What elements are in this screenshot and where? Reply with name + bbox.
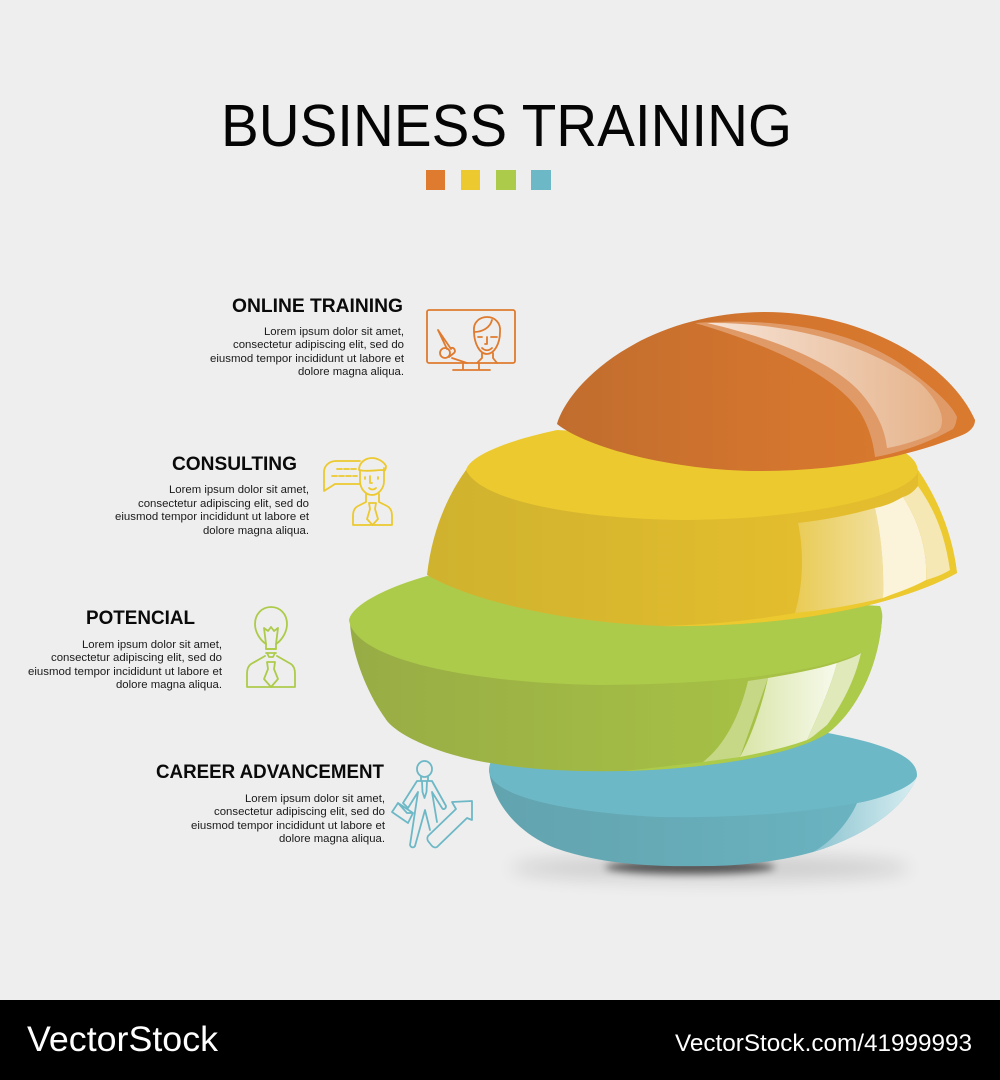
orange dome: [557, 312, 975, 471]
title: BUSINESS TRAINING: [221, 93, 792, 159]
panel: potencial text: Lorem ipsum dolor sit amet,: [82, 639, 222, 651]
panel: career advancement text: eiusmod tempor incididunt ut labore et: [191, 820, 385, 832]
panel: online training text: eiusmod tempor incididunt ut labore et: [210, 353, 404, 365]
panel: potencial text: dolore magna aliqua.: [116, 679, 222, 691]
ground shadow: [510, 855, 910, 881]
footer bar: [0, 1000, 1000, 1080]
panel: online training text: consectetur adipiscing elit, sed do: [233, 339, 404, 351]
green top surface: [349, 576, 882, 685]
panel: consulting text: [115, 454, 309, 537]
panel: yellow layer: [427, 430, 957, 626]
panel: online training text: [210, 296, 404, 378]
panel: online training text: ONLINE TRAINING: [232, 296, 403, 317]
panel: consulting text: dolore magna aliqua.: [203, 525, 309, 537]
panel: consulting text: consectetur adipiscing elit, sed do: [138, 498, 309, 510]
blue highlight: [813, 776, 917, 852]
yellow top surface: [466, 430, 918, 520]
panel: career advancement text: [156, 762, 385, 845]
yellow rim: [660, 470, 957, 626]
footer logo: VectorStock: [27, 1020, 219, 1059]
panel: potencial text: consectetur adipiscing elit, sed do: [51, 652, 222, 664]
orange highlight: [707, 323, 942, 448]
panel: blue layer: [489, 727, 917, 866]
footer url: VectorStock.com/41999993: [675, 1030, 972, 1057]
green bowl: [350, 620, 882, 771]
panel: potencial text: POTENCIAL: [86, 608, 195, 629]
color legend squares: [426, 170, 551, 190]
orange highlight band: [695, 322, 957, 457]
blue bowl: [489, 770, 917, 866]
panel: career advancement text: CAREER ADVANCEMENT: [156, 762, 384, 783]
icon: career person with arrow: [392, 761, 472, 847]
panel: consulting text: CONSULTING: [172, 454, 297, 475]
panel: online training text: dolore magna aliqua.: [298, 366, 404, 378]
green rim: [625, 620, 882, 771]
yellow glass highlight: [795, 486, 950, 613]
panel: consulting text: eiusmod tempor incididunt ut labore et: [115, 511, 309, 523]
panel: consulting text: Lorem ipsum dolor sit amet,: [169, 484, 309, 496]
panel: orange layer: [557, 312, 975, 471]
icon: online training screen: [427, 310, 515, 370]
panel: potencial text: [28, 608, 222, 691]
panel: green layer: [349, 576, 882, 771]
panel: career advancement text: consectetur adipiscing elit, sed do: [214, 806, 385, 818]
panel: career advancement text: dolore magna aliqua.: [279, 833, 385, 845]
yellow body: [427, 470, 957, 626]
icon: potencial lightbulb head: [247, 607, 295, 687]
blue top surface: [489, 727, 917, 817]
panel: career advancement text: Lorem ipsum dolor sit amet,: [245, 793, 385, 805]
icon: consulting person with speech bubble: [324, 458, 392, 525]
green highlight: [703, 653, 861, 762]
panel: potencial text: eiusmod tempor incididunt ut labore et: [28, 666, 222, 678]
panel: online training text: Lorem ipsum dolor sit amet,: [264, 326, 404, 338]
